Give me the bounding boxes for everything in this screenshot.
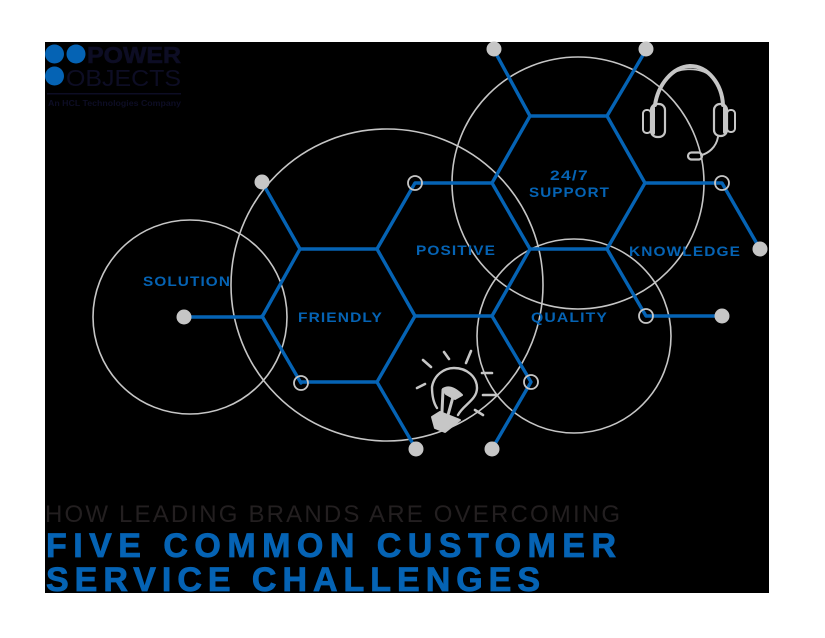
title: main heading: SERVICE CHALLENGES xyxy=(46,561,540,599)
hexagon labels: 24/7 xyxy=(550,167,589,183)
logo: PowerObjects: An HCL Technologies Company xyxy=(48,98,181,108)
logo: PowerObjects: POWER xyxy=(87,42,181,68)
gray end nodes xyxy=(176,42,768,456)
hexagon labels: QUALITY xyxy=(531,309,608,325)
title: main heading: FIVE COMMON CUSTOMER xyxy=(46,527,616,565)
background panel xyxy=(45,42,769,593)
gray overlapping circles xyxy=(93,57,704,441)
icon: headset xyxy=(643,66,735,160)
open ring nodes xyxy=(294,176,729,390)
hexagon labels: FRIENDLY xyxy=(298,309,383,325)
hexagon labels xyxy=(143,167,741,325)
logo: PowerObjects xyxy=(45,42,181,108)
hexagon labels: SUPPORT xyxy=(529,184,610,200)
logo: PowerObjects: OBJECTS xyxy=(66,65,181,91)
hexagon labels: KNOWLEDGE xyxy=(629,243,741,259)
title: main heading xyxy=(46,527,616,599)
hexagon network lines xyxy=(184,50,760,449)
title: subtitle line: HOW LEADING BRANDS ARE OVERCOMING xyxy=(45,501,620,528)
hexagon labels: POSITIVE xyxy=(416,242,496,258)
icon: light bulb xyxy=(417,351,497,432)
hexagon labels: SOLUTION xyxy=(143,273,231,289)
